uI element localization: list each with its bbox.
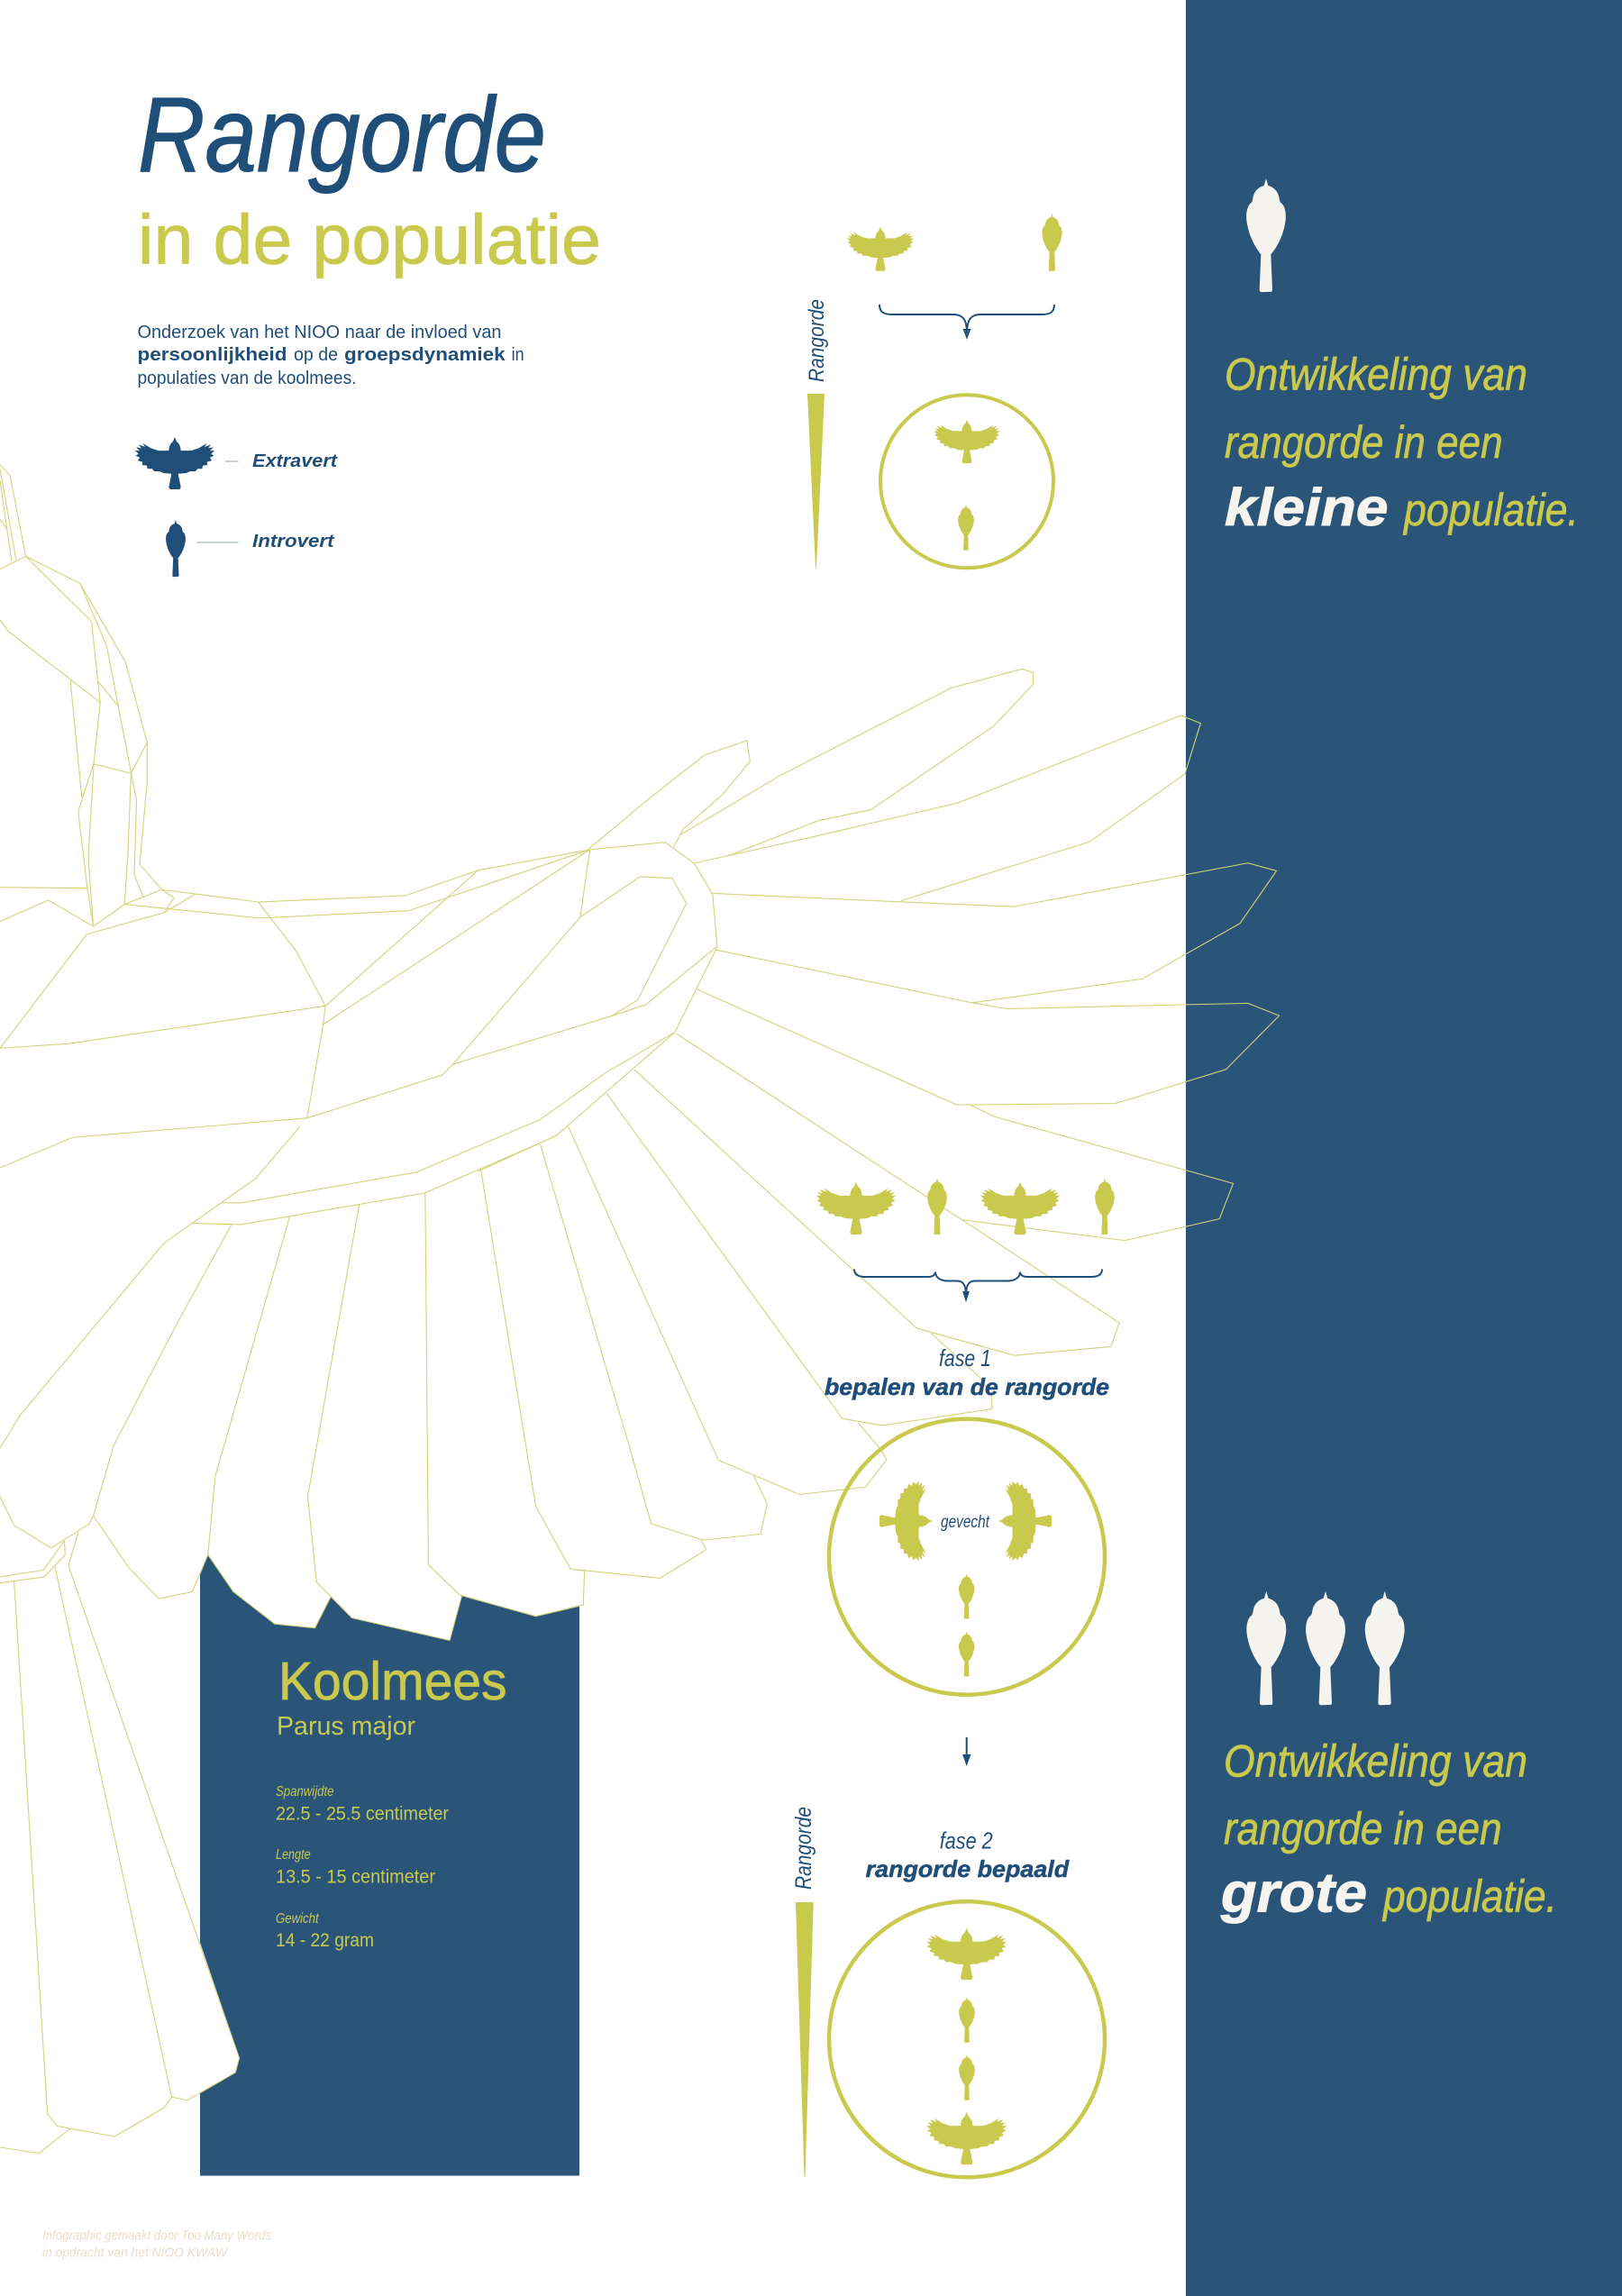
heading: fase 2: rangorde bepaald [866,1855,1070,1882]
heading: Koolmees: Koolmees [278,1652,506,1711]
heading: fase 1: fase 1 [939,1344,991,1371]
heading: fase 1: bepalen van de rangorde [825,1373,1109,1400]
wireframe: primary feathers [588,669,1280,1355]
icon: cream bird [1246,178,1286,292]
intro text: op de [294,345,338,365]
rank label: small population: Rangorde [805,299,829,382]
heading: large population: rangorde in een [1224,1804,1502,1854]
intro text: populaties van de koolmees. [137,369,357,388]
panel: Koolmees facts background [200,1554,579,2175]
legend: introvert: Introvert [252,532,335,551]
fact: length: 13.5 - 15 centimeter [276,1867,435,1888]
arrow: phase 1 to phase 2 [964,1737,970,1763]
phase 1: four birds [816,1179,1115,1235]
fact: weight: 14 - 22 gram [276,1930,374,1951]
intro text [137,323,524,388]
right panel: large population text [1220,1591,1557,1925]
title [138,76,601,279]
panel text: Koolmees facts [276,1652,506,1951]
heading: small population [1225,350,1579,537]
fact: length [276,1847,435,1888]
credits: Infographic gemaakt door Too Many Words [42,2228,271,2244]
heading: small population: kleine [1225,478,1388,537]
icon: fighting bird left [879,1481,933,1561]
heading: large population: grote [1220,1863,1367,1925]
legend: introvert [166,520,335,577]
wireframe: secondary feather tips [569,1093,992,1578]
wireframe: inner wing feathers [0,1126,585,1640]
subheading: Parus major: Parus major [277,1712,415,1741]
intro text: persoonlijkheid [137,345,287,365]
heading: small population: Ontwikkeling van [1225,350,1527,400]
legend: extravert: Extravert [252,451,338,471]
credits: in opdracht van het NIOO KWAW [42,2246,229,2261]
title: in de populatie [138,200,601,279]
fact: weight [276,1911,374,1951]
brace arrow: phase 1 [854,1269,1102,1299]
fact: length: Lengte [276,1847,311,1863]
heading: small population: rangorde in een [1225,417,1503,468]
intro text: in [512,345,524,365]
heading: fase 2: fase 2 [940,1827,993,1854]
icon: two introvert birds [959,1573,974,1677]
fact: wingspan: 22.5 - 25.5 centimeter [276,1804,449,1824]
circle: phase 1 fight [829,1419,1105,1695]
wireframe: tail feathers [0,1566,240,2154]
heading: fase 2 [866,1827,1070,1882]
wireframe: head and body [0,464,717,1171]
heading: fase 1 [825,1344,1109,1400]
intro text: groepsdynamiek [344,345,506,365]
label: gevecht: gevecht [941,1513,990,1532]
circle: small population hierarchy [880,395,1053,568]
small population: two birds [847,214,1062,271]
heading: large population: Ontwikkeling van [1224,1736,1527,1787]
rank wedge: phase 2 [796,1902,814,2177]
intro text: Onderzoek van het NIOO naar de invloed van [137,323,501,342]
heading: large population: populatie. [1381,1872,1557,1922]
brace arrow: small population [879,305,1054,337]
credits [42,2228,271,2261]
rank label: phase 2: Rangorde [791,1807,816,1890]
illustration: wireframe bird with spread wing [0,464,1280,2154]
title: Rangorde [138,76,546,195]
circle: phase 2 hierarchy [829,1901,1105,2177]
icon: fighting bird right [998,1481,1052,1561]
heading: small population: populatie. [1402,485,1579,535]
rank wedge: small population [807,394,825,568]
fact: wingspan: Spanwijdte [276,1784,334,1799]
wireframe: long feather edge [541,1144,652,1524]
legend: extravert [135,437,338,489]
heading: large population [1220,1736,1557,1925]
fact: weight: Gewicht [276,1911,319,1927]
panel: right blue column [1186,0,1622,2296]
icon: three cream birds [1246,1591,1405,1705]
right panel: small population text [1225,178,1579,537]
fact: wingspan [276,1784,449,1824]
